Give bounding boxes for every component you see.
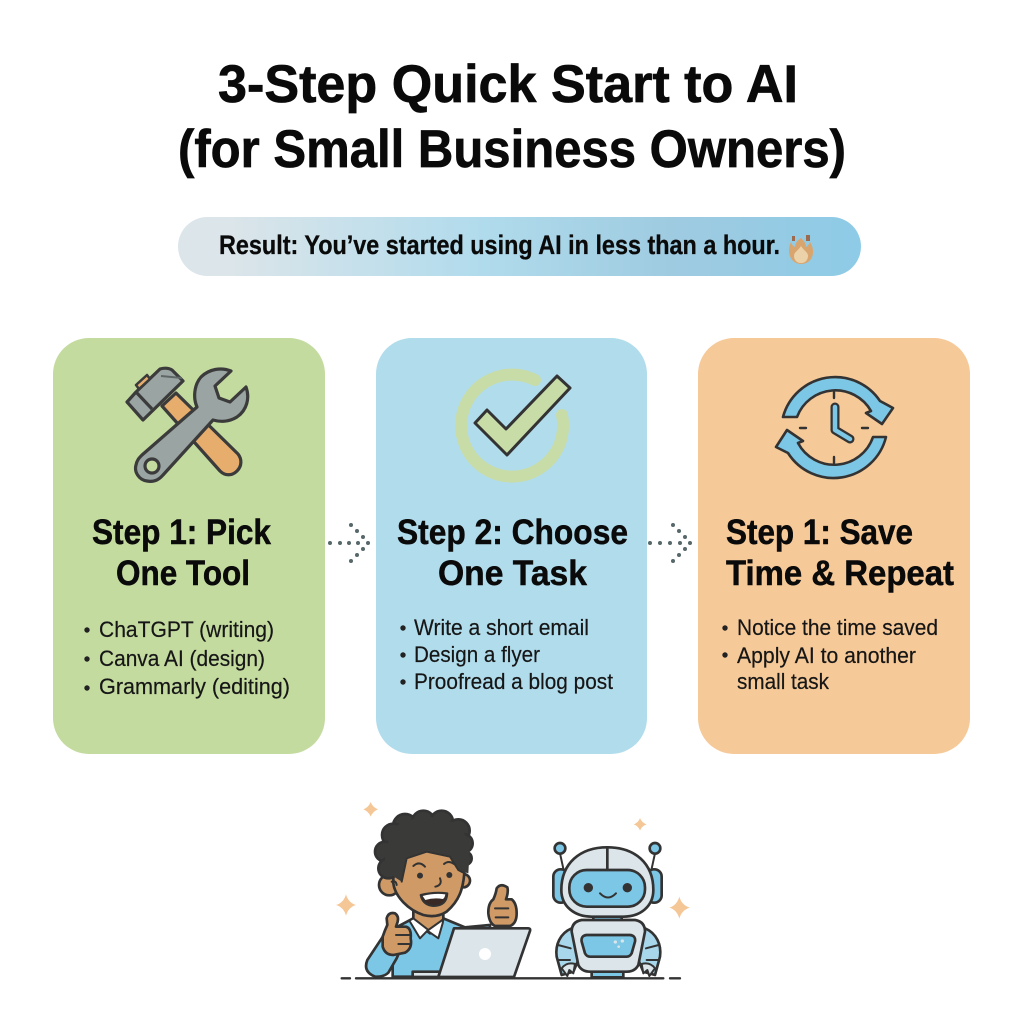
heading: step 1: Step 1: Pick: [92, 513, 271, 552]
list: results: [722, 615, 938, 694]
hair: [375, 811, 473, 882]
list: tasks: Proofread a blog post: [414, 669, 614, 694]
list: results: Notice the time saved: [737, 615, 938, 640]
list: tasks: [400, 615, 614, 694]
list: tools: Grammarly (editing): [99, 674, 290, 699]
arrow: step 2 to step 3: [648, 523, 692, 563]
robot: [553, 843, 662, 977]
list: tasks: Design a flyer: [414, 642, 540, 667]
heading: step 3: [726, 513, 954, 593]
panel: step 1: [53, 338, 325, 754]
panel: step 3: [698, 338, 970, 754]
ground line: [342, 975, 680, 982]
list: tools: ChaTGPT (writing): [99, 617, 274, 642]
sweater: [366, 918, 490, 977]
heading: step 2: [397, 513, 628, 593]
sparkles: [336, 802, 690, 919]
heading: step 2: Step 2: Choose: [397, 513, 628, 552]
result banner: [178, 217, 861, 276]
panel: step 2: [376, 338, 647, 754]
heading: step 1: One Tool: [116, 554, 250, 593]
title: [178, 55, 846, 179]
right thumb: [488, 885, 517, 926]
list: tools: [84, 617, 290, 699]
icon: clock with cycle arrows: [776, 377, 893, 478]
list: tasks: Write a short email: [414, 615, 589, 640]
icon: hammer and wrench: [127, 368, 248, 481]
robot arms: [556, 928, 578, 975]
title: 3-Step Quick Start to AI: [218, 55, 798, 114]
list: results: Apply AI to another: [737, 643, 916, 668]
person: [366, 811, 530, 977]
list: tools: Canva AI (design): [99, 646, 265, 671]
result banner: Result: You’ve started using AI in less than a hour.: [219, 230, 780, 260]
heading: step 1: [92, 513, 271, 593]
heading: step 3: Time & Repeat: [726, 554, 954, 593]
heading: step 3: Step 1: Save: [726, 513, 913, 552]
laptop: [413, 972, 440, 977]
illustration: person and robot: [336, 802, 690, 978]
icon: flame: [789, 235, 813, 264]
title: (for Small Business Owners): [178, 120, 846, 179]
list: results: small task: [737, 669, 830, 694]
arrow: step 1 to step 2: [328, 523, 370, 563]
heading: step 2: One Task: [438, 554, 588, 593]
left thumb: [383, 913, 411, 955]
icon: check mark in circle: [461, 375, 570, 477]
